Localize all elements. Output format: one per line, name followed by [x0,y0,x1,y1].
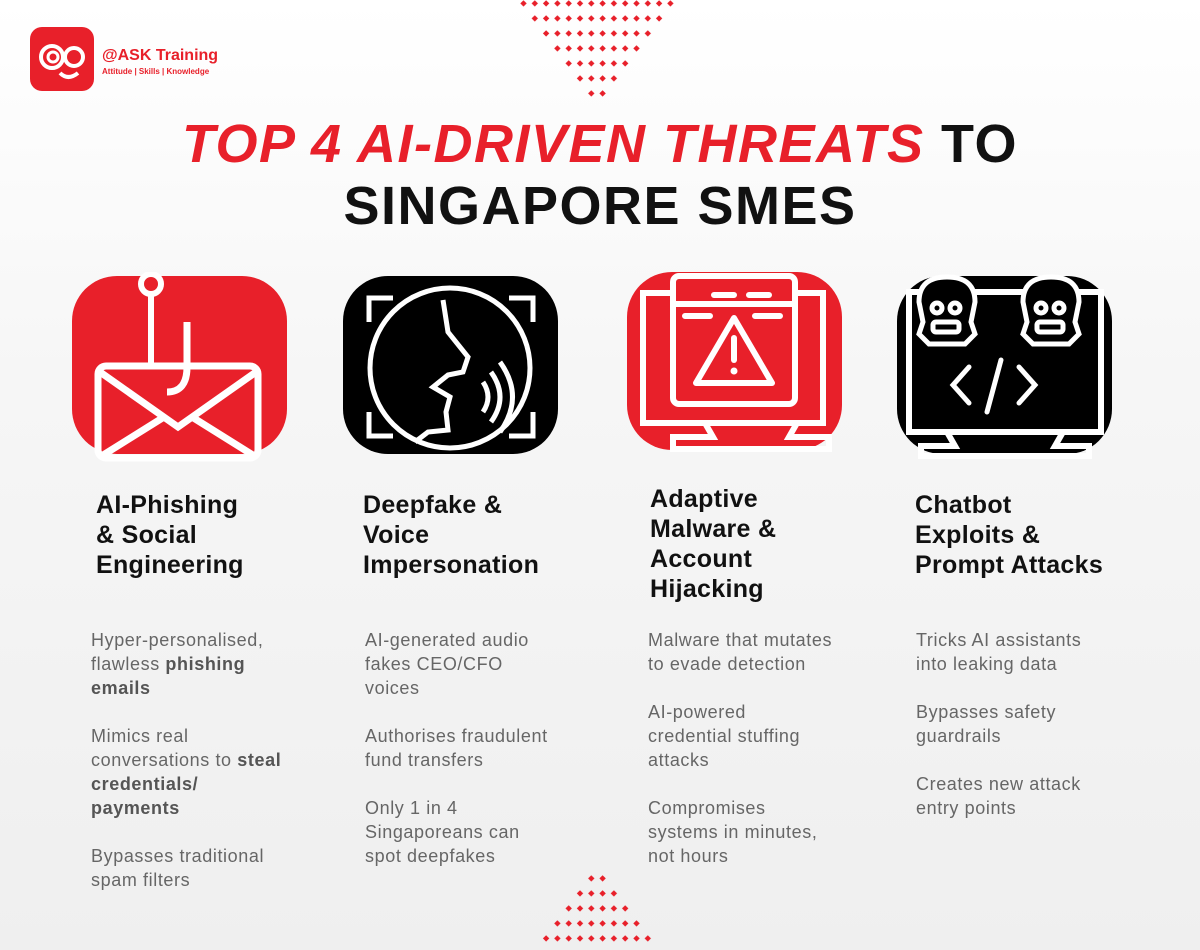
text: col2: spot deepfakes [365,846,496,866]
icon: deepfake voice [343,276,558,454]
heading: col3: Account [650,545,752,573]
text: col3: Compromises [648,798,766,818]
text: col1: flawless phishing [91,654,245,674]
title: TOP 4 AI-DRIVEN THREATS TO [182,114,1018,174]
heading: col3 [650,485,776,603]
text: col3: AI-powered [648,702,746,722]
text: col4: Bypasses safety [916,702,1056,722]
text: col1: conversations to steal [91,750,281,770]
heading: col1: & Social [96,521,197,549]
text: col2: Authorises fraudulent [365,726,548,746]
heading: col3: Adaptive [650,485,758,513]
text: col2: fund transfers [365,750,483,770]
text: col1: payments [91,798,180,818]
icon: malware [627,272,842,452]
text: col1: Hyper-personalised, [91,630,263,650]
heading: col4: Chatbot [915,491,1012,519]
icon: chatbot exploit [897,276,1112,459]
logo: @ASK Training [102,47,218,64]
text: col1: Mimics real [91,726,189,746]
text: col3 [648,630,832,866]
text: col1 [91,630,281,890]
heading: col1 [96,491,244,579]
heading: col3: Malware & [650,515,776,543]
title: SINGAPORE SMES [343,176,857,236]
text: col4: into leaking data [916,654,1057,674]
heading: col3: Hijacking [650,575,764,603]
text: col3: credential stuffing [648,726,800,746]
text: col1: emails [91,678,151,698]
heading: col4 [915,491,1103,579]
text: col4: entry points [916,798,1016,818]
text: col1: Bypasses traditional [91,846,264,866]
text: col1: spam filters [91,870,190,890]
heading: col1: AI-Phishing [96,491,238,519]
heading: col4: Exploits & [915,521,1040,549]
heading: col2: Deepfake & [363,491,502,519]
text: col4: guardrails [916,726,1001,746]
heading: col2: Voice [363,521,429,549]
text: col3: systems in minutes, [648,822,817,842]
text: col4: Tricks AI assistants [916,630,1081,650]
text: col3: attacks [648,750,709,770]
text: col2: fakes CEO/CFO [365,654,503,674]
text: col3: Malware that mutates [648,630,832,650]
text: col2: Only 1 in 4 [365,798,458,818]
logo [30,27,218,91]
title [182,114,1018,236]
icon: phishing [72,276,287,462]
text: col2: voices [365,678,420,698]
text: col2 [365,630,548,866]
text: col2: AI-generated audio [365,630,529,650]
heading: col1: Engineering [96,551,244,579]
heading: col4: Prompt Attacks [915,551,1103,579]
logo: Attitude | Skills | Knowledge [102,67,209,76]
heading: col2 [363,491,539,579]
text: col4: Creates new attack [916,774,1081,794]
text: col3: to evade detection [648,654,806,674]
text: col2: Singaporeans can [365,822,520,842]
text: col1: credentials/ [91,774,198,794]
heading: col2: Impersonation [363,551,539,579]
text: col4 [916,630,1081,818]
text: col3: not hours [648,846,728,866]
